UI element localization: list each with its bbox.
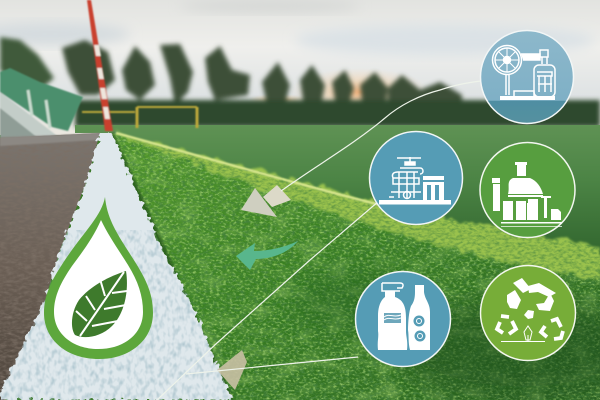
background photo: white field line — [0, 133, 240, 400]
background photo: running track — [0, 130, 110, 400]
icon circle: chemical flask and containers — [480, 142, 575, 238]
icon: pale paper arrow lower — [217, 350, 247, 390]
icon: teal arrow — [236, 241, 298, 270]
background photo: sky — [0, 0, 600, 135]
icon circle: plastic bottles — [356, 272, 450, 366]
background photo: bright sideline — [110, 130, 600, 280]
icon: pale paper arrow upper — [241, 185, 291, 217]
background photo: yellow goal frame — [82, 107, 197, 128]
background photo: tree line — [0, 37, 600, 127]
icon circle: recycling machinery — [480, 30, 574, 124]
icon circle: recycling symbols — [480, 266, 576, 360]
icon: leaf water drop — [44, 197, 153, 359]
icon: wheel — [492, 46, 522, 74]
background photo: red and white pole — [87, 0, 113, 131]
connector lines — [157, 81, 481, 400]
background photo: green stand at left — [0, 68, 83, 138]
background photo: grass lane — [110, 130, 600, 400]
icon circle: processing plant — [370, 132, 462, 224]
background photo: far field — [75, 125, 600, 262]
